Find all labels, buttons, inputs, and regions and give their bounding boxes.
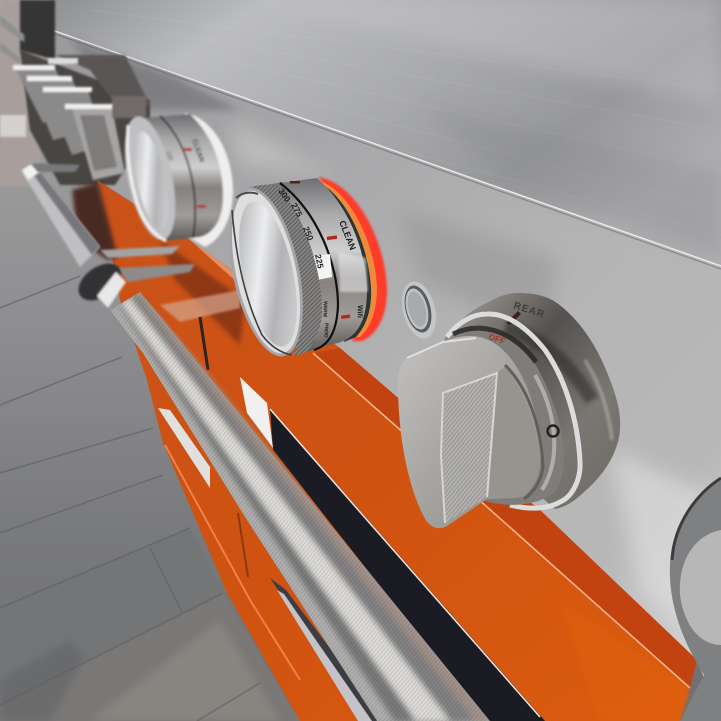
collar text: REAR xyxy=(512,300,546,321)
dark recess near the handle bracket xyxy=(72,182,118,260)
oven control dial xyxy=(216,177,387,363)
rear collar xyxy=(430,293,620,509)
front band xyxy=(262,182,338,354)
right-edge next knob xyxy=(670,478,721,721)
far dial band xyxy=(140,114,223,241)
rear band xyxy=(280,178,367,351)
burner knob xyxy=(398,293,620,528)
dial temperature labels: PROG xyxy=(322,323,329,338)
far dial face xyxy=(115,112,185,244)
knob skirt xyxy=(420,331,564,505)
knob handle xyxy=(398,336,541,528)
red indicator ticks xyxy=(327,235,337,240)
flame mark xyxy=(548,426,558,436)
dial temperature labels: 275 xyxy=(289,201,305,219)
bright reflection patch xyxy=(338,252,368,292)
reflections on the glossy top edge xyxy=(160,290,240,322)
far dial labels: CLEAN xyxy=(190,138,205,163)
dial temperature labels: 300 xyxy=(276,186,293,204)
blurred distant knobs xyxy=(13,58,146,180)
dial face rim xyxy=(216,181,316,363)
panel shading xyxy=(70,40,240,110)
white door label xyxy=(240,377,273,448)
knob grip: smooth facet xyxy=(489,367,540,497)
white far dial halo xyxy=(185,113,233,247)
far oven dial xyxy=(115,112,233,247)
burner knob: OFF xyxy=(487,331,507,346)
oven handle bar xyxy=(22,163,490,721)
support brackets xyxy=(30,163,195,308)
orange oven front xyxy=(97,180,697,721)
dial temperature labels xyxy=(276,186,363,338)
chrome ring xyxy=(447,314,580,508)
dial temperature labels: CLEAN xyxy=(337,219,358,251)
dial face xyxy=(228,196,308,352)
push button xyxy=(396,278,442,342)
black oven window xyxy=(270,408,545,721)
dial temperature labels: 225 xyxy=(313,253,326,270)
orange door ledge xyxy=(313,348,697,688)
dial temperature labels: 250 xyxy=(301,225,316,242)
bar near section with highlight stripes xyxy=(110,292,490,721)
dial temperature labels: WARM xyxy=(321,301,328,317)
far-left dark rack xyxy=(0,0,150,185)
dial temperature labels: Wifi xyxy=(356,305,363,318)
orange ledge highlight xyxy=(313,353,690,688)
knob grip: knurled xyxy=(441,373,497,523)
far oven dial: 225 xyxy=(164,151,173,163)
lower drawer trim and seams xyxy=(158,317,385,721)
upper steel backsplash xyxy=(50,0,721,265)
bar far section xyxy=(22,165,100,267)
knurled ring xyxy=(248,185,322,356)
glowing red ring xyxy=(318,177,387,341)
wall at far end of the room xyxy=(0,0,40,186)
